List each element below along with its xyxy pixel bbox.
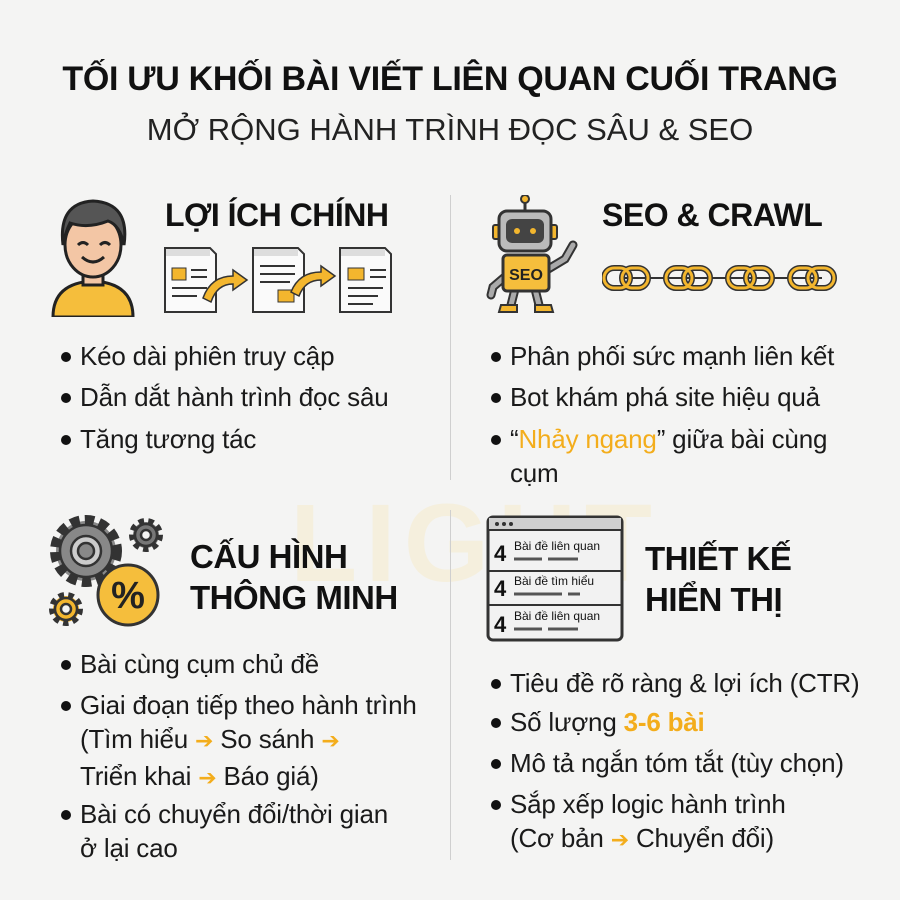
icon: avatar — [52, 200, 134, 317]
panel: cau hinh thong minh — [49, 515, 417, 863]
panel: seo & crawl — [486, 195, 837, 488]
panel: cau hinh thong minh: ở lại cao — [80, 833, 178, 863]
heading — [645, 540, 791, 618]
bullets: Kéo dài phiên truy cập — [80, 341, 334, 371]
panel: cau hinh thong minh: Bài có chuyển đổi/thời gian — [80, 799, 388, 829]
heading: SEO & CRAWL — [602, 197, 822, 233]
heading — [190, 538, 398, 616]
panel: thiet ke hien thi: Mô tả ngắn tóm tắt (tùy chọn) — [510, 748, 844, 778]
watermark: LIGHT — [290, 482, 660, 605]
icon: page flow — [164, 247, 392, 313]
icon: related posts widget: 4 — [494, 576, 507, 601]
heading: CẤU HÌNH — [190, 538, 347, 575]
icon: related posts widget — [486, 516, 624, 642]
icon: gears: % — [111, 575, 145, 617]
panel: loi ich chinh: Tăng tương tác — [80, 424, 256, 454]
panel: thiet ke hien thi: (Cơ bản ➔ Chuyển đổi) — [510, 823, 774, 853]
title: TỐI ƯU KHỐI BÀI VIẾT LIÊN QUAN CUỐI TRANG — [62, 60, 838, 98]
panel: cau hinh thong minh: Giai đoạn tiếp theo hành trình — [80, 690, 417, 720]
panel: cau hinh thong minh: (Tìm hiểu ➔ So sánh ➔ — [80, 724, 340, 754]
icon: related posts widget: Bài đề liên quan — [514, 609, 600, 623]
heading: HIỂN THỊ — [645, 581, 782, 618]
heading: THIẾT KẾ — [645, 540, 791, 577]
subtitle: MỞ RỘNG HÀNH TRÌNH ĐỌC SÂU & SEO — [147, 112, 753, 147]
panel: seo & crawl: cụm — [510, 458, 559, 488]
icon: robot: SEO — [509, 267, 543, 284]
icon: gears — [49, 515, 163, 626]
heading: LỢI ÍCH CHÍNH — [165, 197, 388, 233]
icon: related posts widget: Bài đề liên quan — [514, 539, 600, 553]
icon: related posts widget: 4 — [494, 612, 507, 637]
panel: cau hinh thong minh: Triển khai ➔ Báo giá) — [80, 761, 319, 791]
icon: related posts widget: Bài đề tìm hiểu — [514, 574, 594, 588]
heading: THÔNG MINH — [190, 579, 398, 616]
icon: robot — [486, 195, 578, 313]
panel: loi ich chinh — [52, 197, 392, 454]
icon: related posts widget: 4 — [494, 541, 507, 566]
panel: loi ich chinh: Dẫn dắt hành trình đọc sâu — [80, 382, 388, 412]
panel: thiet ke hien thi: Sắp xếp logic hành trình — [510, 789, 786, 819]
bullets: Bài cùng cụm chủ đề — [80, 649, 319, 679]
bullets: Phân phối sức mạnh liên kết — [510, 341, 834, 371]
icon: chain links — [602, 265, 837, 291]
panel: thiet ke hien thi — [486, 516, 859, 853]
panel: seo & crawl: “Nhảy ngang” giữa bài cùng — [510, 424, 827, 454]
panel: seo & crawl: Bot khám phá site hiệu quả — [510, 382, 820, 412]
bullets: Tiêu đề rõ ràng & lợi ích (CTR) — [510, 668, 859, 698]
panel: thiet ke hien thi: Số lượng 3-6 bài — [510, 707, 705, 737]
